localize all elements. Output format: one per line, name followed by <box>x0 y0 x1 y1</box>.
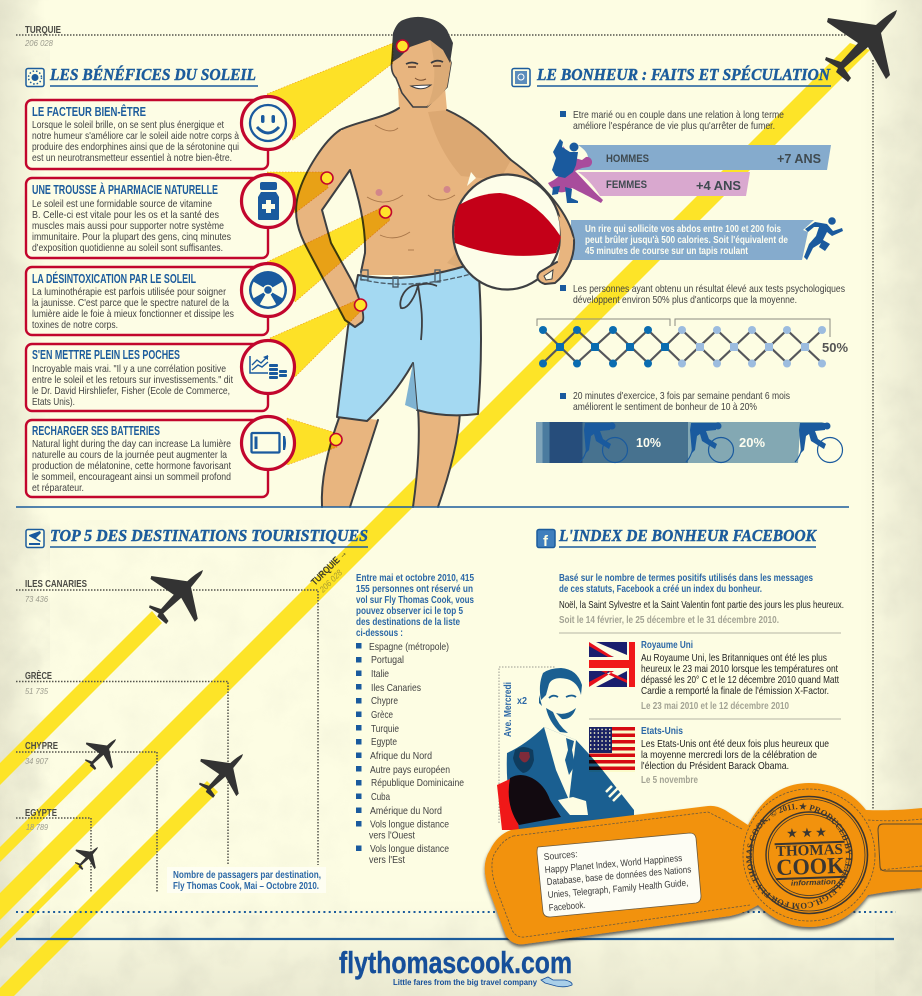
label: Egypte <box>25 808 57 832</box>
text: Etats-Unis: Les Etats-Unis ont été deux fois plus heureux que <box>641 738 829 750</box>
left arm <box>296 130 363 327</box>
right upper arm <box>440 110 574 250</box>
body target dots <box>321 40 408 446</box>
beach ball <box>453 174 561 290</box>
label: Turquie rotated: TURQUIE → <box>309 548 350 588</box>
bar: femmes: FEMMES <box>606 179 647 191</box>
list: destinations: Egypte <box>371 736 397 748</box>
label: Turquie rotated: 206 028 <box>317 567 344 595</box>
text: intro destinations <box>356 572 474 639</box>
label: Chypre: 34 907 <box>25 756 48 766</box>
list: destinations <box>356 641 464 866</box>
bottom dotted route <box>16 911 896 913</box>
panel: désintoxication: toxines de notre corps. <box>32 319 118 331</box>
footer rule <box>16 938 894 940</box>
panel: trousse à pharmacie <box>26 178 268 258</box>
label: Chypre: CHYPRE <box>25 741 58 752</box>
list: destinations: Espagne (métropole) <box>369 641 449 653</box>
bar: hommes <box>578 145 831 170</box>
caption: passengers: Fly Thomas Cook, Mai – Octobre 2010. <box>173 880 319 892</box>
sources label: Database, base de données des Nations <box>546 864 692 888</box>
flag: USA <box>589 727 635 772</box>
route lines <box>16 590 318 892</box>
panel: plein les poches: Etats Unis). <box>32 396 75 408</box>
text: intro destinations: des destinations de la liste <box>356 616 460 628</box>
bar: hommes: HOMMES <box>606 153 649 165</box>
bar: laughter callout: 45 minutes de course sur un tapis roulant <box>585 245 748 257</box>
list: destinations: Chypre <box>371 695 398 707</box>
label: Turquie <box>24 25 61 48</box>
label: Grèce: GRÈCE <box>25 669 52 682</box>
text: Etats-Unis: l'élection du Président Barack Obama. <box>641 760 789 772</box>
list: destinations: Iles Canaries <box>371 682 421 694</box>
list: destinations: Grèce <box>371 709 393 721</box>
stamp text: x2 <box>517 695 527 707</box>
bar: hommes: +7 ANS <box>777 151 821 166</box>
text: exercice <box>560 390 790 413</box>
large plane top right <box>825 10 897 82</box>
text: Royaume Uni <box>641 639 839 712</box>
icon: dancers <box>548 139 603 203</box>
bar: laughter callout: peut brûler jusqu'à 500 calories. Soit l'équivalent de <box>585 234 788 246</box>
list: destinations: Italie <box>371 668 389 680</box>
text: Royaume Uni: Au Royaume Uni, les Britanniques ont été les plus <box>641 652 827 664</box>
panel: plein les poches: S'EN METTRE PLEIN LES POCHES <box>32 348 180 362</box>
panel: plein les poches: Incroyable mais vrai. "Il y a une corrélation positive <box>32 363 226 375</box>
text: Etats-Unis <box>641 725 829 786</box>
text: couple: améliore l'espérance de vie plus qu'arrêter de fumer. <box>573 120 775 132</box>
panel: facteur bien-être: Lorsque le soleil brille, on se sent plus énergique et <box>32 119 224 131</box>
text: exercice: 20 minutes d'exercice, 3 fois par semaine pendant 6 mois <box>573 390 790 402</box>
seal: Thomas Cook: ★ <box>815 824 827 840</box>
label: Chypre <box>25 741 58 766</box>
sources label: Facebook. <box>548 900 586 914</box>
label: Turquie rotated <box>309 548 350 595</box>
heading: bénéfices: LES BÉNÉFICES DU SOLEIL <box>49 65 256 84</box>
seal: Thomas Cook: COOK <box>776 853 845 880</box>
text: Royaume Uni: Cardie a remporté la finale de l'émission X-Factor. <box>641 685 829 697</box>
sources label: Sources: <box>543 849 578 863</box>
panel: recharger: et réparateur. <box>32 482 84 494</box>
stamp outline <box>499 667 556 823</box>
flag: UK <box>589 642 635 687</box>
label: Turquie: 206 028 <box>24 38 53 48</box>
bar: laughter callout <box>571 220 814 260</box>
panel: recharger: Natural light during the day can increase La lumière <box>32 438 231 450</box>
panel: plein les poches: le Dr. David Hirshliefer, Fisher (Ecole de Commerce, <box>32 385 230 397</box>
panel: facteur bien-être: produire des endorphines ainsi que de la sérotonine qui <box>32 141 239 153</box>
heading: facebook: L'INDEX DE BONHEUR FACEBOOK <box>558 526 818 545</box>
section: top 5 destinations <box>16 526 474 893</box>
chart: cycling bar <box>536 422 842 463</box>
text: intro destinations: 155 personnes ont réservé un <box>356 583 473 595</box>
list: destinations: République Dominicaine <box>371 777 464 789</box>
label: Egypte: EGYPTE <box>25 808 57 819</box>
text: intro destinations: ci-dessous : <box>356 627 403 639</box>
panel: recharger: naturelle au cours de la journée peut augmenter la <box>32 449 227 461</box>
label: Iles Canaries: 73 436 <box>25 594 48 604</box>
list: destinations: Vols longue distance <box>370 843 449 855</box>
panel: facteur bien-être: notre humeur s'améliore car le soleil aide notre corps à <box>32 130 239 142</box>
bar: femmes: +4 ANS <box>696 178 741 193</box>
panel: facteur bien-être: est un neurotransmetteur essentiel à notre bien-être. <box>32 152 232 164</box>
icon: battery <box>242 416 294 470</box>
panel: trousse à pharmacie: immunitaire. Pour la plupart des gens, cinq minutes <box>32 231 231 243</box>
icon: plane Grèce <box>199 754 243 798</box>
footer logo: Little fares from the big travel company <box>393 978 538 987</box>
list: destinations: Portugal <box>371 654 404 666</box>
panel: trousse à pharmacie: UNE TROUSSE À PHARMACIE NATURELLE <box>32 182 218 197</box>
icon: plane Chypre <box>85 739 116 770</box>
icon: chart and coins <box>242 340 294 394</box>
footer logo: flythomascook.com <box>339 945 572 980</box>
bar: femmes <box>578 172 750 196</box>
text: intro destinations: pouvez observer ici le top 5 <box>356 605 463 617</box>
list: destinations: Amérique du Nord <box>370 805 442 817</box>
list: destinations: vers l'Est <box>369 854 405 866</box>
panel: recharger: RECHARGER SES BATTERIES <box>32 424 160 438</box>
panel: recharger <box>26 420 268 497</box>
head <box>392 30 451 107</box>
bar: laughter callout: Un rire qui sollicite vos abdos entre 100 et 200 fois <box>585 223 781 235</box>
right dotted border <box>872 60 874 810</box>
list: destinations: Afrique du Nord <box>370 750 432 762</box>
heading: facebook: f <box>543 533 549 550</box>
text: Royaume Uni: dépassé les 20° C et le 12 décembre 2010 quand Matt <box>641 674 839 686</box>
panel: trousse à pharmacie: Le soleil est une formidable source de vitamine <box>32 198 212 210</box>
list: destinations: Autre pays européen <box>370 764 450 776</box>
seal: Thomas Cook: ★ <box>801 825 813 840</box>
label: Egypte: 18 789 <box>26 822 48 832</box>
panel: facteur bien-être <box>26 100 268 169</box>
luggage tag with sources and seal <box>482 783 922 950</box>
panel: recharger: le sommeil, encourageant ainsi un sommeil profond <box>32 471 231 483</box>
text: couple <box>560 109 784 132</box>
panel: trousse à pharmacie: B. Celle-ci est vitale pour les os et la santé des <box>32 209 219 221</box>
text: Royaume Uni: Royaume Uni <box>641 639 693 651</box>
text: facebook intro: Soit le 14 février, le 25 décembre et le 31 décembre 2010. <box>559 614 779 626</box>
panel: désintoxication <box>26 267 268 335</box>
chart: antibody lattice 50%: 50% <box>822 340 848 355</box>
panel: désintoxication: La luminothérapie est parfois utilisée pour soigner <box>32 286 226 298</box>
panel: facteur bien-être: LE FACTEUR BIEN-ÊTRE <box>32 104 146 119</box>
panel: recharger: production de mélatonine, cette hormone favorisant <box>32 460 231 472</box>
panel: trousse à pharmacie: muscles mais aussi pour supporter notre système <box>32 220 224 232</box>
right hand <box>538 215 574 284</box>
seal: Thomas Cook: THOMAS <box>776 842 843 860</box>
text: couple: Etre marié ou en couple dans une relation à long terme <box>573 109 784 121</box>
text: facebook intro: Basé sur le nombre de termes positifs utilisés dans les messages <box>559 572 813 584</box>
sources label <box>537 833 701 917</box>
illustration: Obama <box>497 668 634 830</box>
label: Iles Canaries: ILES CANARIES <box>25 579 87 590</box>
section: happiness bars and stats <box>512 65 848 463</box>
panel: désintoxication: la jaunisse. C'est parce que le spectre naturel de la <box>32 297 229 309</box>
icon: medicine bottle <box>242 174 294 228</box>
panel: désintoxication: LA DÉSINTOXICATION PAR LE SOLEIL <box>32 271 196 286</box>
list: destinations: Vols longue distance <box>370 818 449 830</box>
icon: runner <box>804 217 843 260</box>
chart: cycling bar: 20% <box>739 435 765 450</box>
list: destinations: Turquie <box>371 723 399 735</box>
heading: le bonheur: LE BONHEUR : FAITS ET SPÉCULATION <box>536 65 831 84</box>
seal: Thomas Cook: ★ <box>786 825 798 841</box>
text: Etats-Unis: la moyenne mercredi lors de la célébration de <box>641 749 817 761</box>
text: exercice: améliorent le sentiment de bonheur de 10 à 20% <box>573 401 757 413</box>
section rule <box>16 506 849 508</box>
icon: radiation <box>242 264 294 316</box>
label: Grèce: 51 735 <box>25 686 48 696</box>
panel: plein les poches: entre le soleil et les retours sur investissements." dit <box>32 374 233 386</box>
list: destinations: vers l'Ouest <box>369 830 415 842</box>
text: Royaume Uni: Le 23 mai 2010 et le 12 décembre 2010 <box>641 700 789 712</box>
sources label: Unies, Telegraph, Family Health Guide, <box>547 878 689 901</box>
text: Royaume Uni: heureux le 23 mai 2010 lorsque les températures ont <box>641 663 838 675</box>
icon: plane Canaries <box>149 570 203 624</box>
text: intro destinations: vol sur Fly Thomas Cook, vous <box>356 594 474 606</box>
text: intro destinations: Entre mai et octobre 2010, 415 <box>356 572 474 584</box>
icon: plane Egypte <box>75 847 98 870</box>
shoulder outline <box>447 110 574 240</box>
shorts <box>337 262 481 421</box>
footer logo <box>339 945 572 987</box>
chest shadow <box>428 110 511 180</box>
icon: smile <box>242 96 294 150</box>
light cones from icons to body <box>267 43 393 465</box>
caption: passengers: Nombre de passagers par destination, <box>173 869 321 881</box>
text: Etats-Unis: Le 5 novembre <box>641 774 698 786</box>
caption: passengers <box>167 867 326 893</box>
text: facebook intro <box>559 572 844 626</box>
heading: top 5: TOP 5 DES DESTINATIONS TOURISTIQUES <box>50 526 368 545</box>
section: index Facebook <box>497 526 844 830</box>
panel: trousse à pharmacie: d'exposition quotidienne au soleil sont suffisantes. <box>32 242 223 254</box>
text: anticorps <box>560 283 845 306</box>
text: facebook intro: de ces statuts, Facebook a créé un index du bonheur. <box>559 583 762 595</box>
label: Turquie: TURQUIE <box>25 25 61 36</box>
panel: désintoxication: lumière aide le foie à mieux fonctionner et dissipe les <box>32 308 234 320</box>
label: Iles Canaries <box>25 579 87 604</box>
stamp text <box>503 682 527 737</box>
section: les bénéfices du soleil <box>26 65 294 497</box>
sources label: Happy Planet Index, World Happiness <box>544 853 683 876</box>
icon: logo plane <box>541 977 572 987</box>
chart: cycling bar: 10% <box>636 435 661 450</box>
stamp text: Ave. Mercredi <box>503 682 514 737</box>
text: Etats-Unis: Etats-Unis <box>641 725 683 737</box>
top dotted route <box>16 34 851 36</box>
label: Grèce <box>25 669 52 696</box>
illustration: man with beach ball <box>296 17 574 507</box>
list: destinations: Cuba <box>371 791 390 803</box>
panel: plein les poches <box>26 344 268 411</box>
text: anticorps: Les personnes ayant obtenu un résultat élevé aux tests psychologiques <box>573 283 845 295</box>
text: anticorps: développent environ 50% plus d'anticorps que la moyenne. <box>573 294 797 306</box>
seal: Thomas Cook: ★ PRODUCED BY LEIGHLEIGH.COM FOR FLY THOMAS COOK, © 2011. <box>746 802 852 909</box>
seal: Thomas Cook: information <box>791 877 837 888</box>
heading: facebook <box>537 526 818 550</box>
chart: antibody lattice 50% <box>537 319 848 368</box>
